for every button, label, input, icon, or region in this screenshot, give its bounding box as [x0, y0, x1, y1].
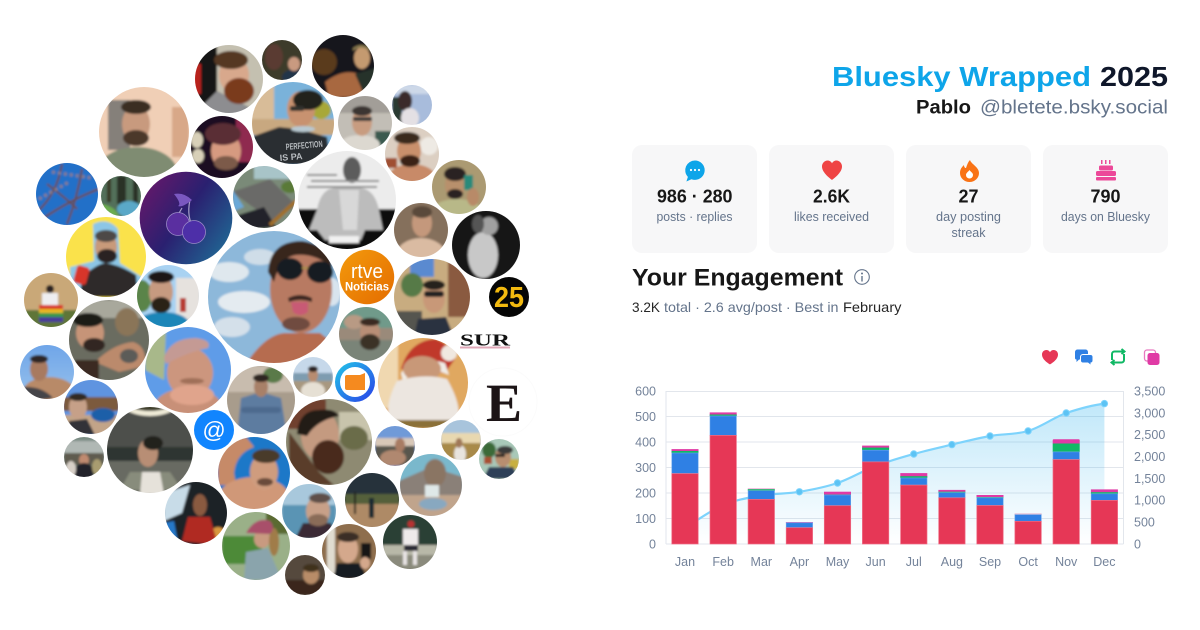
avatar: bald man on beach: [375, 426, 415, 466]
line points: [796, 400, 1108, 495]
left axis labels: 600: [635, 384, 656, 398]
red like bars: [672, 435, 1118, 544]
avatar: man with moustache and teal shirt: [137, 265, 199, 327]
avatar: man with car: [64, 380, 118, 434]
month labels: Oct: [1018, 555, 1038, 569]
icon: quotes: [1144, 350, 1160, 365]
avatar: SUR logo: SUR: [460, 330, 511, 350]
stat value: 790: [1090, 186, 1120, 206]
avatar: man in green shirt: [99, 87, 189, 177]
avatar: smiling man by river: [239, 441, 379, 581]
right axis labels: 2,500: [1134, 428, 1165, 442]
stat label: likes received: [794, 209, 869, 224]
engagement summary: 3.2K: [632, 299, 661, 315]
user name and handle: @bletete.bsky.social: [980, 98, 1168, 118]
user name and handle: Pablo: [916, 98, 971, 118]
avatar: rtve Noticias logo: Noticias: [345, 282, 389, 294]
avatar: rtve Noticias logo: [340, 250, 394, 304]
avatar: man at night square: [302, 430, 442, 570]
stat label: [936, 209, 1001, 240]
avatar: mirror selfie: [432, 160, 486, 214]
avatar: black and white portrait: [298, 151, 396, 249]
avatar: woman by the sea: [392, 85, 432, 125]
month labels: Apr: [790, 555, 809, 569]
left axis labels: 500: [635, 410, 656, 424]
icon: cake: [1096, 160, 1116, 180]
month labels: Jul: [906, 555, 922, 569]
right axis labels: 3,000: [1134, 406, 1165, 420]
avatar: small selfie in forest: [262, 40, 302, 80]
avatar: man with sunglasses and plants: [479, 439, 519, 479]
avatar: crowd: [64, 437, 104, 477]
stat label: posts · replies: [656, 209, 733, 224]
avatar: SUR logo: [460, 330, 511, 350]
avatar: man with red-lit hair: [191, 116, 253, 178]
title: 2025: [1100, 61, 1168, 92]
avatar: man with sunglasses in street: [394, 259, 470, 335]
right axis labels: 1,500: [1134, 472, 1165, 486]
avatar: man in field: [441, 420, 481, 460]
right axis labels: 1,000: [1134, 494, 1165, 508]
avatar: E logo: [469, 368, 537, 436]
avatar: 25 logo: 25: [494, 282, 524, 314]
right axis labels: [1134, 384, 1165, 552]
avatar bubble cluster: [20, 35, 529, 595]
avatar: bearded man: [195, 45, 263, 113]
avatar: @ icon: @: [202, 417, 226, 443]
month labels: Sep: [979, 555, 1001, 569]
avatar: cherry logo: [140, 172, 232, 264]
left axis labels: 100: [635, 512, 656, 526]
avatar: rainbow flag: [24, 273, 78, 327]
cumulative line: [685, 404, 1104, 528]
avatar: man on yellow background: [66, 217, 146, 297]
icon: likes: [1042, 350, 1058, 364]
user name and handle: [916, 98, 1168, 118]
avatar: man in hoodie under light: [107, 407, 193, 493]
avatar: man with mohawk: [286, 399, 372, 485]
panel: days on Bluesky: [1043, 145, 1168, 253]
legend icons: [1042, 349, 1160, 365]
avatar: @ icon: [194, 410, 234, 450]
stat value: 2.6K: [813, 186, 850, 206]
avatar: man in blue sweater: [227, 366, 295, 434]
avatar: man by blue pool: [218, 437, 290, 509]
engagement summary: total · 2.6 avg/post · Best in: [664, 299, 838, 315]
avatar: man in Perfection t-shirt: IS PA: [279, 151, 303, 163]
avatar: man with dog on train: [312, 35, 374, 97]
month labels: Jun: [866, 555, 886, 569]
icon: info: [855, 270, 869, 284]
left axis labels: [635, 384, 656, 552]
avatar: man with beard in green water: [339, 307, 393, 361]
avatar: man in Perfection t-shirt: [252, 82, 334, 164]
icon: speech bubble: [685, 160, 705, 182]
right axis labels: 2,000: [1134, 450, 1165, 464]
avatar: man in white shirt on bench: [340, 472, 480, 612]
icon: flame: [960, 160, 979, 182]
avatar: person kneeling on the beach: [400, 454, 462, 516]
avatar: tent in forest: [101, 176, 141, 216]
avatar: man in white shirt by the sea: [293, 357, 333, 397]
avatar: blue sky with tree: [36, 163, 98, 225]
stat label: days on Bluesky: [1061, 209, 1150, 224]
month labels: Feb: [712, 555, 734, 569]
title: Bluesky Wrapped: [832, 61, 1091, 92]
stat value: 27: [958, 186, 978, 206]
stat label: streak: [952, 225, 986, 240]
title: [832, 61, 1168, 92]
stat value: 986 · 280: [657, 186, 732, 206]
icon: reposts: [1112, 349, 1124, 365]
month labels: Mar: [751, 555, 772, 569]
avatar: man with fan behind: [385, 127, 439, 181]
blue reply bars: [672, 416, 1118, 528]
icon: heart: [822, 160, 842, 180]
right axis labels: 0: [1134, 538, 1141, 552]
heading: Your Engagement: Your Engagement: [632, 264, 843, 292]
engagement summary: [632, 299, 902, 315]
avatar: man on train tracks: [233, 166, 295, 228]
avatar: Santa beard: [378, 338, 468, 428]
avatar: man with tattoo and cat: [69, 300, 149, 380]
avatar: main portrait with sunglasses and tongue out: [208, 231, 340, 363]
avatar: black and white figure: [452, 211, 520, 279]
left axis labels: 300: [635, 461, 656, 475]
right axis labels: 3,500: [1134, 384, 1165, 398]
avatar: man in Perfection t-shirt: PERFECTION: [285, 139, 323, 152]
avatar: mirror selfie with black sweater: [279, 481, 419, 621]
left axis labels: 0: [649, 538, 656, 552]
pink quote bars: [672, 412, 1118, 523]
engagement summary: February: [843, 299, 902, 315]
avatar: person with pink cap: [222, 512, 290, 580]
cumulative area: [685, 404, 1104, 544]
month labels: Dec: [1093, 555, 1116, 569]
panel: day posting streak: [906, 145, 1031, 253]
panel: posts and replies: [632, 145, 757, 253]
avatar: man in red shirt: [165, 482, 227, 544]
avatar: man with cap: [145, 327, 231, 413]
month labels: Jan: [675, 555, 695, 569]
month labels: Aug: [941, 555, 963, 569]
icon: replies: [1075, 350, 1092, 364]
avatar: shirtless man in sepia: [394, 203, 448, 257]
left axis labels: 400: [635, 436, 656, 450]
stat label: day posting: [936, 209, 1001, 224]
avatar: 25 logo: [489, 277, 529, 317]
avatar: dim portrait: [235, 505, 375, 630]
avatar: man under blue sky: [20, 345, 74, 399]
month labels: Nov: [1055, 555, 1078, 569]
right axis labels: 500: [1134, 516, 1155, 530]
avatar: rtve Noticias logo: rtve: [351, 261, 383, 283]
chart: monthly engagement stacked bars with cumulative line: [635, 384, 1165, 569]
left axis labels: 200: [635, 486, 656, 500]
month labels: May: [826, 555, 850, 569]
avatar: man with glasses: [338, 96, 392, 150]
avatar: video app icon: [335, 362, 375, 402]
avatar: E logo: E: [486, 373, 522, 433]
month labels: [675, 555, 1116, 569]
green repost bars: [672, 414, 1118, 498]
panel: likes received: [769, 145, 894, 253]
